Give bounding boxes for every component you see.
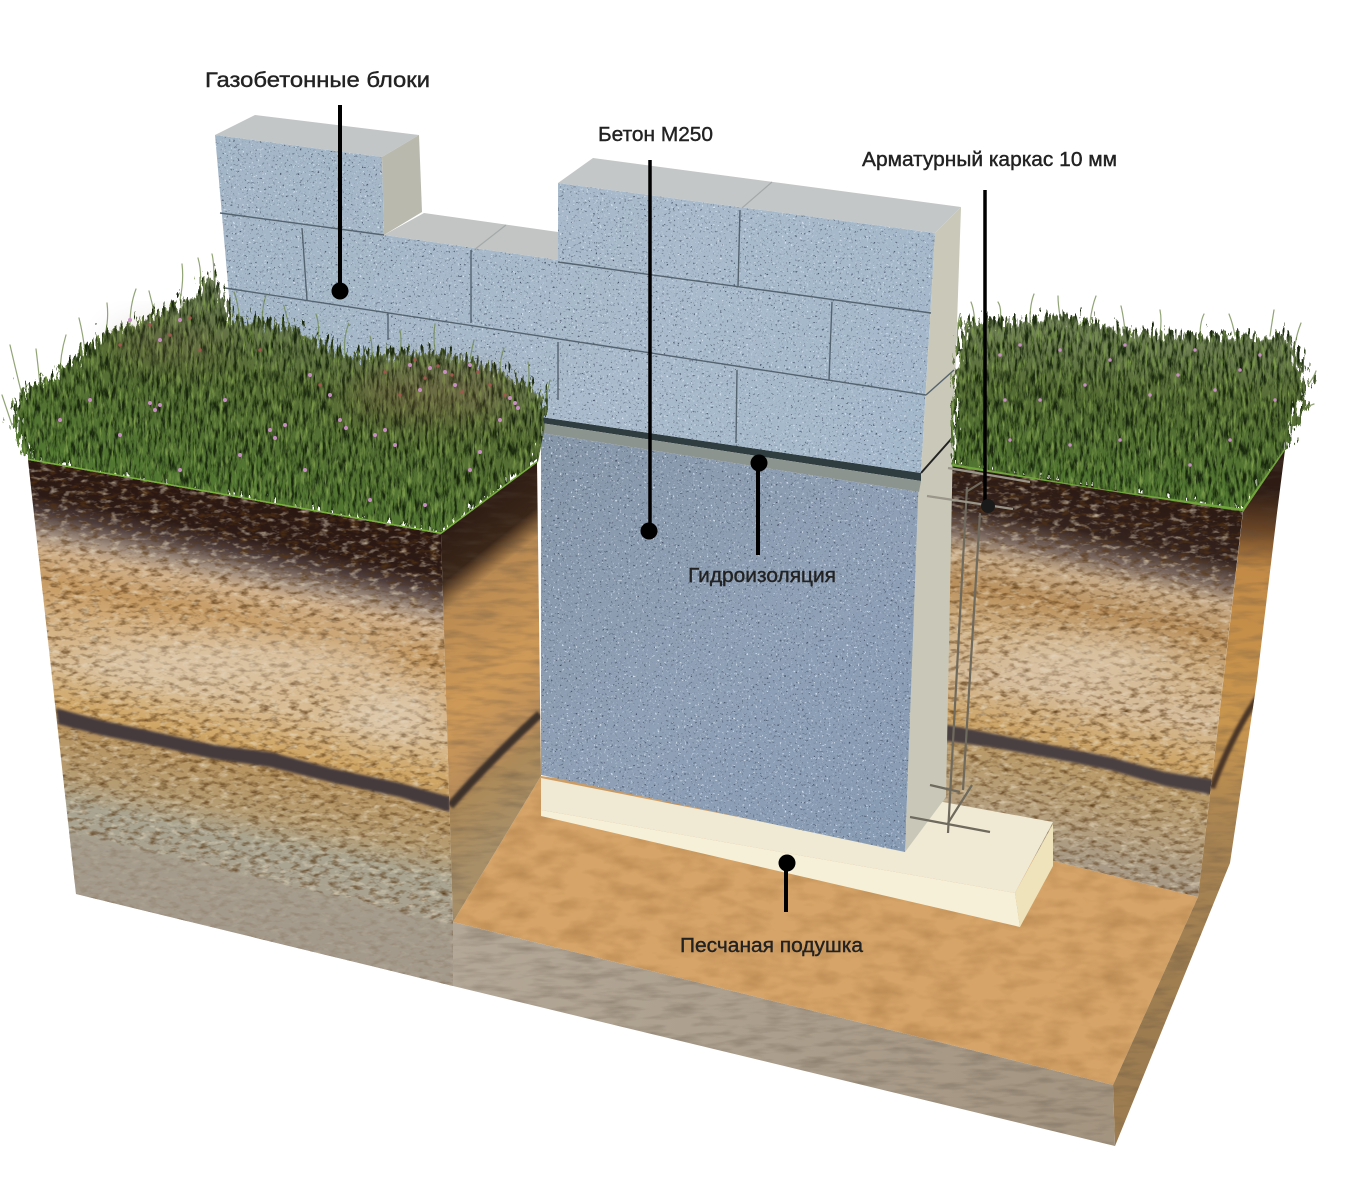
right soil cut: side face <box>1113 450 1285 1146</box>
label: concrete M250 <box>598 123 713 540</box>
right soil cut: back face <box>930 462 1243 897</box>
grass: left plot <box>2 254 550 536</box>
label: rebar cage: Арматурный каркас 10 мм <box>862 149 1117 171</box>
concrete wall M250 <box>541 433 953 852</box>
grass: right plot <box>950 294 1316 514</box>
label: waterproofing: Гидроизоляция <box>688 564 836 587</box>
label: aerated concrete blocks: Газобетонные блоки <box>205 68 430 92</box>
left soil cut: front face <box>28 460 453 986</box>
label: rebar cage <box>862 149 1117 513</box>
label: sand cushion <box>680 854 864 957</box>
left soil cut: trench wall <box>441 462 541 922</box>
label: aerated concrete blocks <box>205 68 430 300</box>
label: concrete M250: Бетон М250 <box>598 123 713 146</box>
base strip under the sand <box>453 922 1115 1146</box>
sand cushion surface <box>453 776 1198 1085</box>
label: sand cushion: Песчаная подушка <box>680 934 864 957</box>
concrete footing slab <box>541 778 1053 927</box>
reinforcement cage <box>910 468 1030 833</box>
waterproofing layer <box>541 417 921 492</box>
aerated concrete blocks <box>215 115 961 473</box>
label: waterproofing <box>688 454 836 587</box>
